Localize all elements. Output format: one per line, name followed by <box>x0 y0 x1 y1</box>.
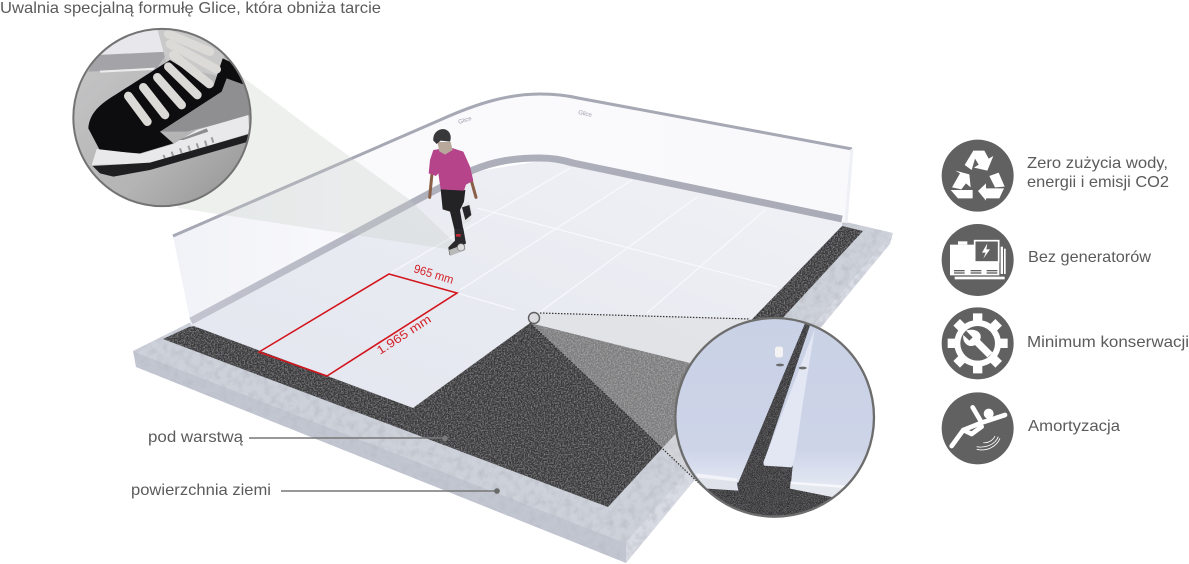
rink wall: Glice <box>578 110 593 119</box>
skater front skate <box>448 228 466 256</box>
skate magnifier lens <box>70 27 257 210</box>
skater torso <box>429 147 473 191</box>
red tile dimension rectangle: 965 mm <box>412 261 455 287</box>
holder vents <box>163 137 213 158</box>
skate photo <box>70 27 257 210</box>
white laces <box>128 34 217 122</box>
red tile dimension rectangle: 1.965 mm <box>374 312 434 358</box>
white blade holder <box>92 115 249 165</box>
floor tile seams <box>389 168 777 313</box>
benefit: zero consumption <box>942 140 1169 212</box>
text: energii i emisji CO2 <box>1027 174 1169 191</box>
red tile dimension rectangle <box>259 261 457 376</box>
joint lens border <box>675 318 874 517</box>
label: powierzchnia ziemi: powierzchnia ziemi <box>131 482 271 499</box>
black boot <box>88 58 245 153</box>
close-up pin and holes <box>775 347 807 369</box>
text: Zero zużycia wody, <box>1027 155 1168 172</box>
benefit: no generators <box>942 224 1151 296</box>
label: pod warstwą <box>148 429 448 446</box>
icon: falling figure <box>942 392 1014 464</box>
icon: gear and wrench <box>942 307 1014 379</box>
joint target circle <box>528 312 540 324</box>
title text: Uwalnia specjalną formułę Glice, która obniża tarcie <box>0 0 381 17</box>
black underlay <box>163 226 863 507</box>
concrete ground slab <box>133 222 893 563</box>
skater legs <box>441 189 465 230</box>
label: pod warstwą: pod warstwą <box>148 429 243 446</box>
skater face <box>437 142 453 155</box>
joint magnifier lens <box>673 317 880 520</box>
text: Bez generatorów <box>1028 249 1151 266</box>
skater helmet <box>433 129 451 144</box>
benefit: shock absorption <box>942 392 1120 464</box>
label: powierzchnia ziemi <box>131 482 500 499</box>
skater arms <box>430 173 476 197</box>
light upper tongue <box>158 30 224 76</box>
rink diagram <box>133 94 893 563</box>
baseboard <box>191 158 842 321</box>
skate lens border <box>73 29 251 206</box>
skate blade <box>93 134 249 177</box>
skate lens cone <box>178 75 457 249</box>
skater rear skate <box>460 201 473 224</box>
text: Amortyzacja <box>1028 418 1120 435</box>
joint lens cone <box>530 313 774 488</box>
skater figure <box>429 129 476 256</box>
white synthetic ice floor <box>191 161 842 408</box>
holder cutout <box>178 128 208 140</box>
rink wall: Glice <box>458 116 473 126</box>
benefit: minimum maintenance <box>942 307 1189 379</box>
text: Minimum konserwacji <box>1027 334 1189 351</box>
icon: generator <box>942 224 1014 296</box>
joint close-up <box>673 317 880 520</box>
icon: recycling <box>942 140 1014 212</box>
text <box>1027 155 1169 191</box>
rink wall <box>173 94 852 325</box>
